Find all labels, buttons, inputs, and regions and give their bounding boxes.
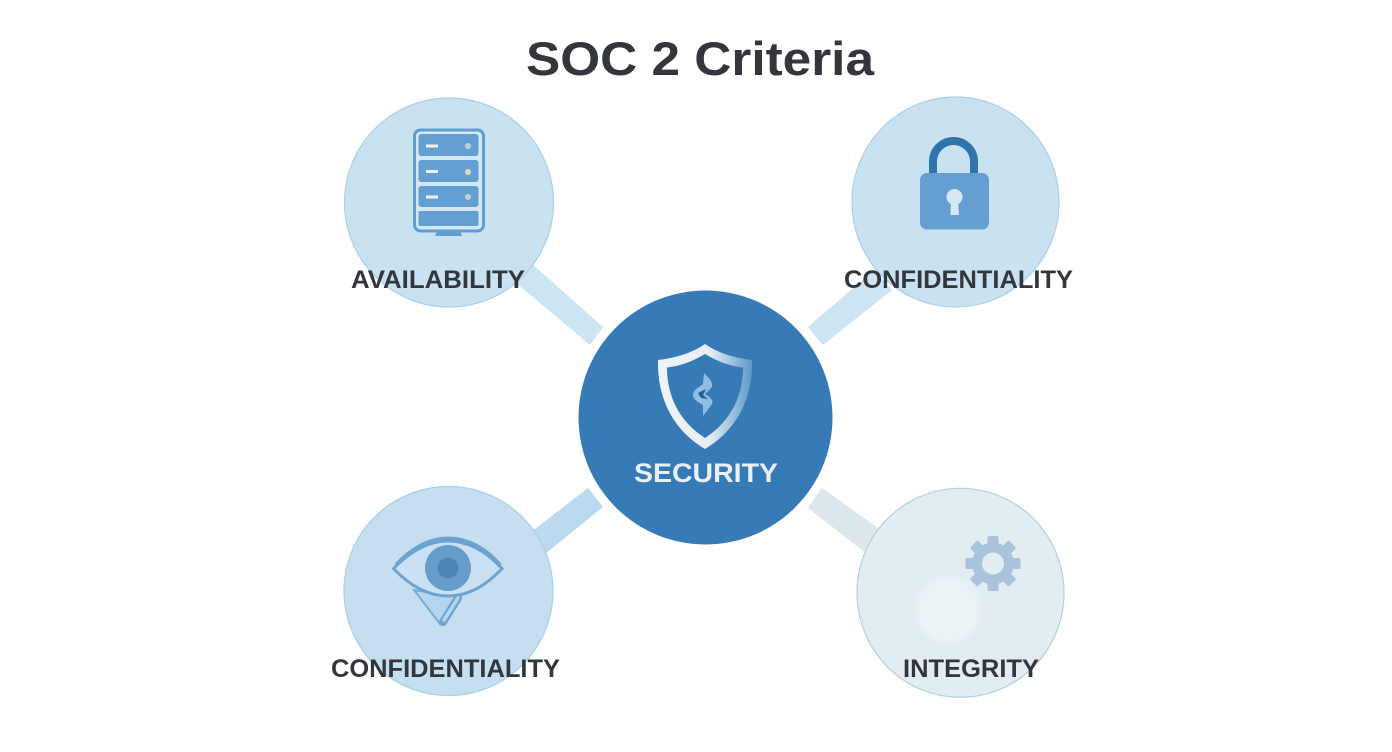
security circle (578, 290, 832, 544)
icon: eye (394, 538, 502, 624)
label: confidentiality: CONFIDENTIALITY (331, 655, 560, 683)
icon: gear (966, 536, 1020, 591)
label: security: SECURITY (634, 458, 778, 488)
panel: security (578, 290, 832, 544)
title: SOC 2 Criteria (526, 32, 875, 85)
connector: top confidentiality to security (808, 270, 892, 345)
icon: server rack (414, 130, 484, 236)
panel: availability (344, 98, 554, 307)
label: integrity: INTEGRITY (903, 655, 1039, 683)
icon: padlock (920, 141, 989, 230)
connector: lower confidentiality to security (531, 488, 603, 554)
panel: confidentiality top (844, 97, 1073, 307)
confidentiality circle (852, 97, 1059, 307)
soft highlight blob (916, 578, 980, 642)
connector: availability to security (516, 262, 603, 345)
integrity circle (857, 488, 1064, 697)
icon: shield (658, 344, 752, 449)
icon: lightning mark (693, 373, 713, 416)
availability circle (344, 98, 554, 307)
label: availability: AVAILABILITY (351, 266, 525, 294)
panel: integrity (857, 488, 1064, 697)
label: confidentiality: CONFIDENTIALITY (844, 266, 1073, 294)
connector: integrity to security (808, 488, 881, 554)
lower confidentiality circle (344, 486, 553, 696)
panel: confidentiality bottom (331, 486, 560, 696)
